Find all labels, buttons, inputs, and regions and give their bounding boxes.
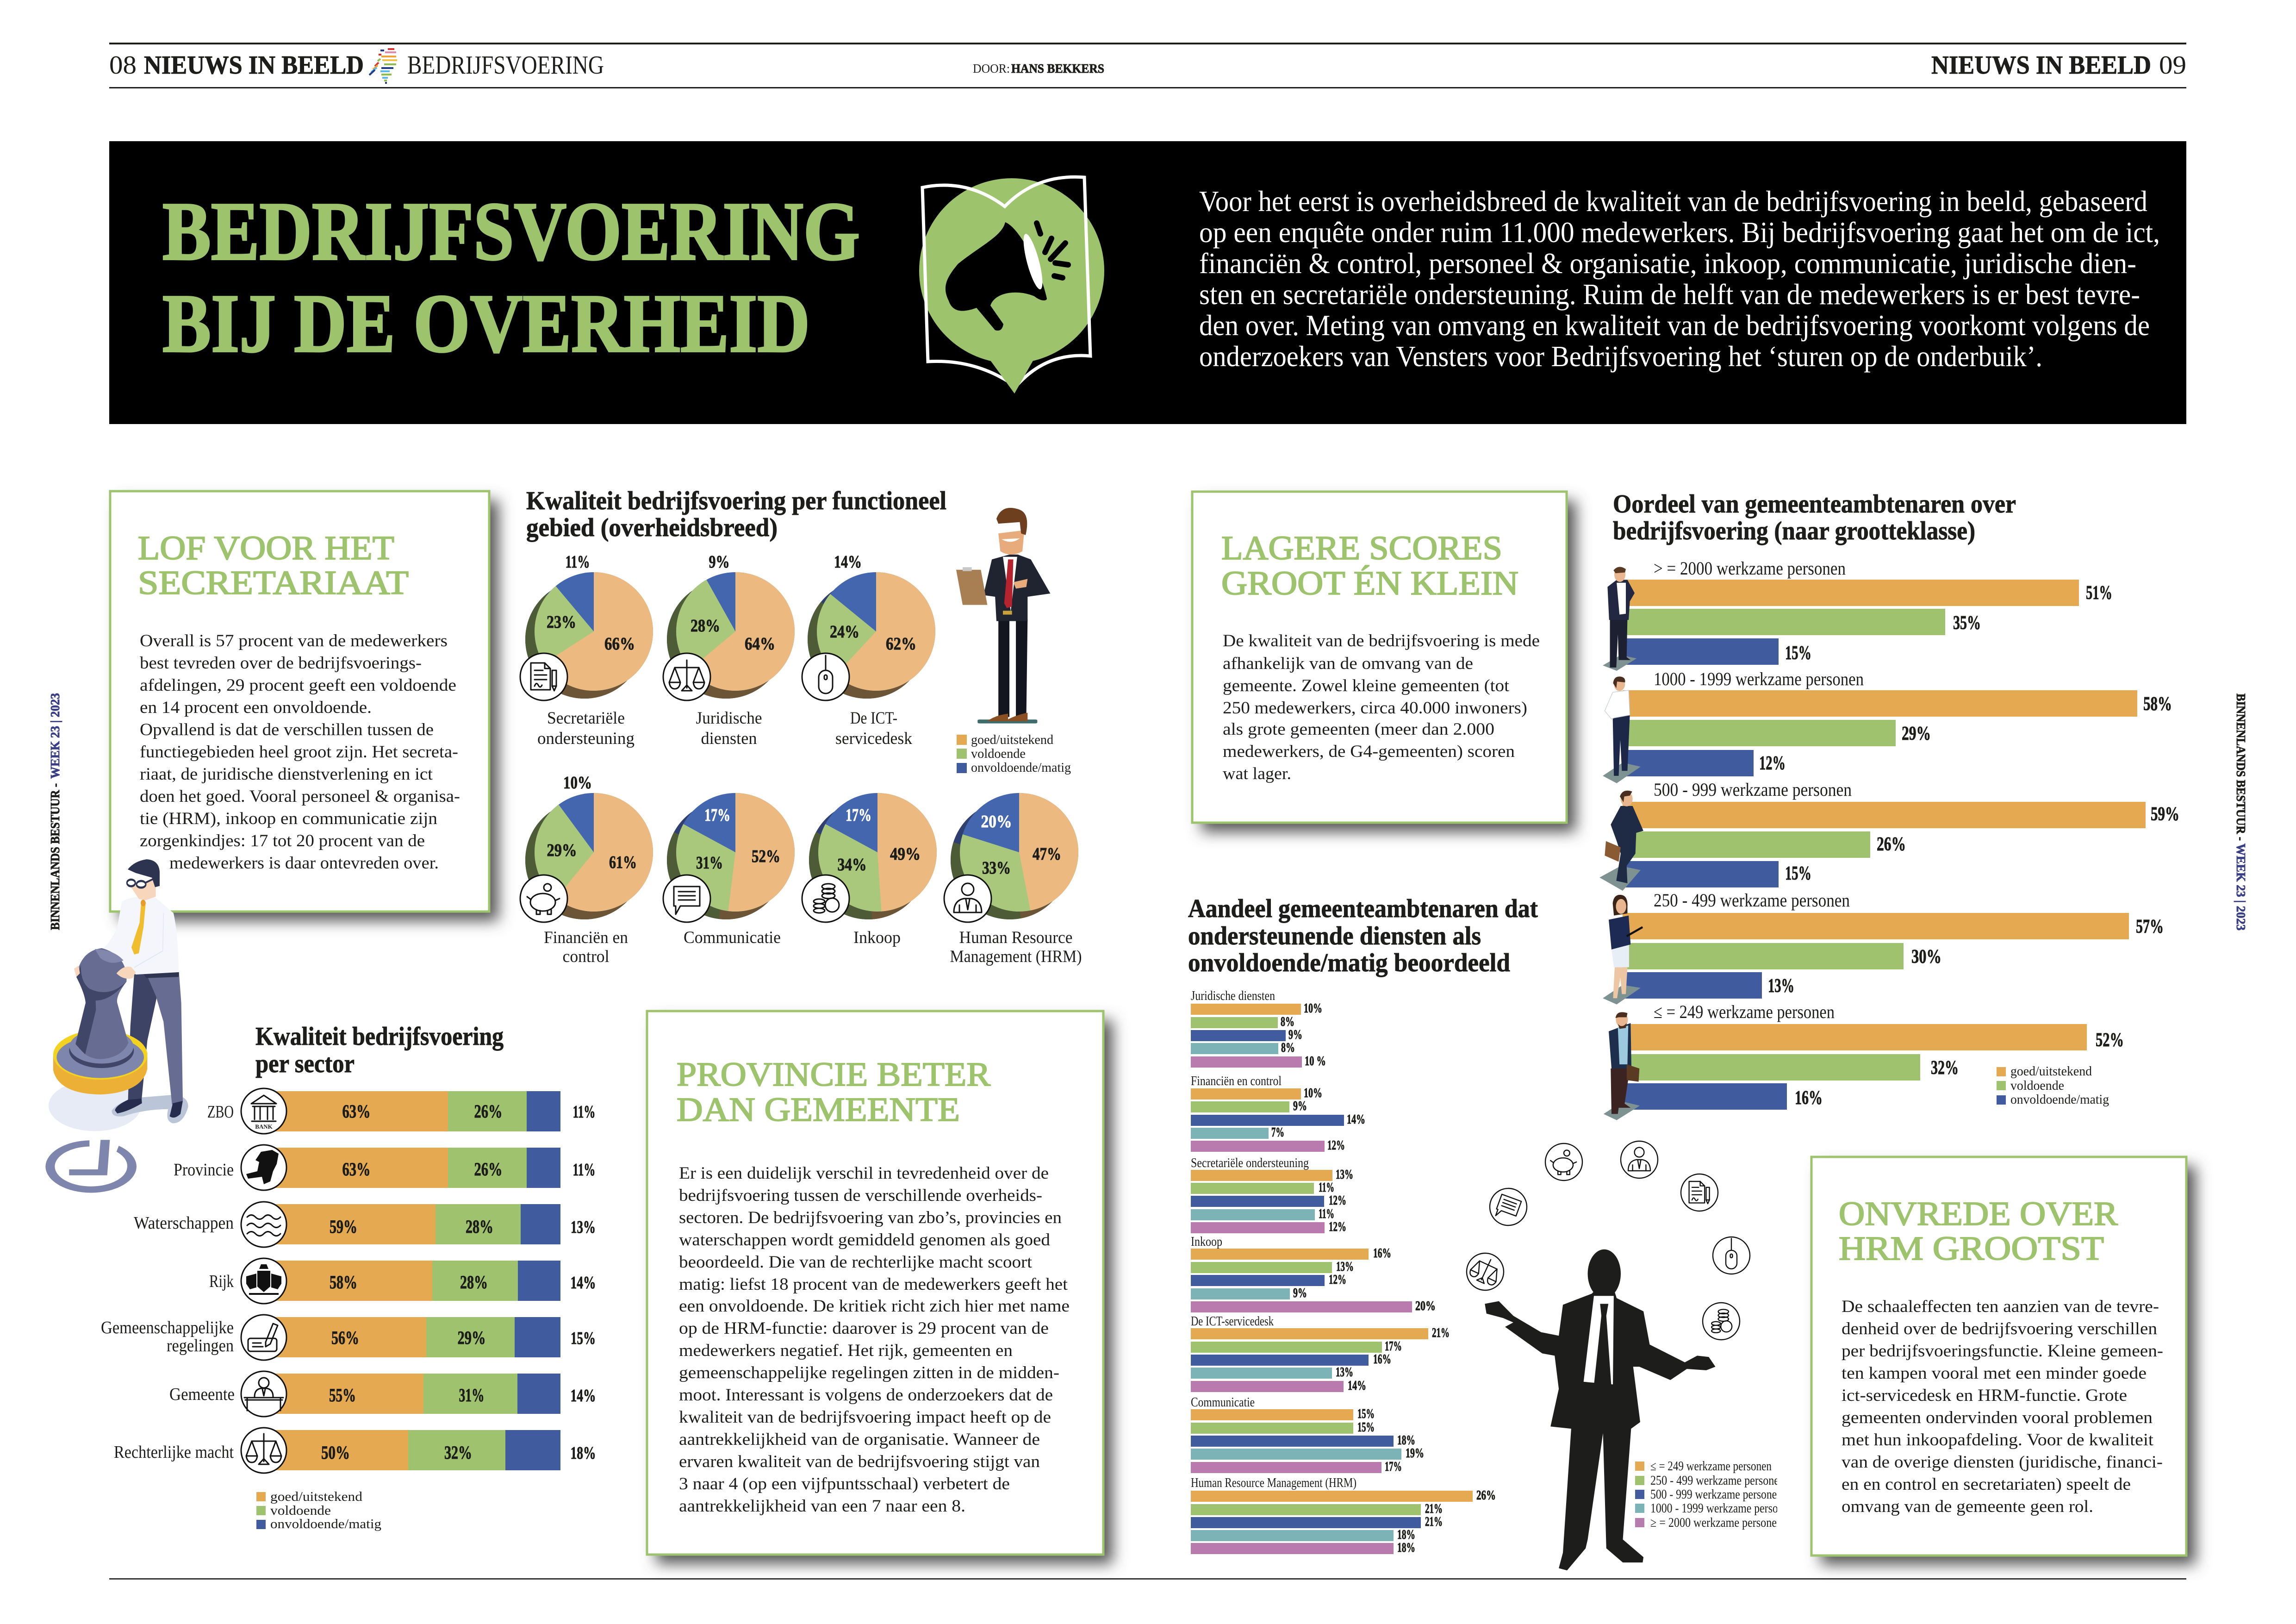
body text: per bedrijfsvoeringsfunctie. Kleine gemeen- bbox=[1842, 1342, 2163, 1361]
bar value labels: 28% bbox=[466, 1216, 493, 1237]
bar value labels: 18% bbox=[570, 1443, 596, 1463]
group: juridische diensten: Juridische diensten bbox=[1191, 989, 1275, 1003]
group: human resource management: 18% bbox=[1397, 1528, 1415, 1542]
bar value labels: 14% bbox=[570, 1386, 596, 1405]
chart title: bedrijfsvoering (naar grootteklasse) bbox=[1613, 517, 1975, 545]
heading: SECRETARIAAT bbox=[138, 564, 409, 601]
pie value labels: 11% bbox=[566, 552, 590, 572]
legend: voldoende bbox=[2010, 1079, 2064, 1093]
intro text: Voor het eerst is overheidsbreed de kwaliteit van de bedrijfsvoering in beeld, gebaseerd bbox=[1199, 185, 2147, 218]
pie value labels: 9% bbox=[709, 552, 729, 572]
body text: gemeente. Zowel kleine gemeenten (tot bbox=[1223, 676, 1510, 695]
title: BIJ DE OVERHEID bbox=[162, 277, 810, 369]
body text: gemeenten ondervinden vooral problemen bbox=[1842, 1408, 2153, 1427]
bar value labels: 14% bbox=[570, 1273, 596, 1293]
heading bbox=[138, 529, 409, 601]
illustration: man with stamp bbox=[45, 859, 188, 1193]
bar value labels: 52% bbox=[2096, 1030, 2124, 1051]
legend bbox=[957, 733, 1071, 775]
page header: 08 bbox=[109, 51, 137, 80]
sector labels: Gemeenschappelijke bbox=[101, 1318, 234, 1337]
group: communicatie bbox=[1191, 1395, 1424, 1474]
pie value labels: 47% bbox=[1033, 844, 1061, 864]
pie: secretariële ondersteuning bbox=[525, 572, 653, 699]
legend: voldoende bbox=[270, 1503, 331, 1518]
bar value labels: 51% bbox=[2086, 582, 2112, 604]
pie icons bbox=[520, 653, 991, 922]
panel: lof voor het secretariaat bbox=[110, 491, 498, 921]
group: financiën en control: 9% bbox=[1293, 1099, 1307, 1113]
group labels: 500 - 999 werkzame personen bbox=[1654, 779, 1852, 800]
bar value labels: 13% bbox=[1768, 975, 1794, 997]
body text: bedrijfsvoering tussen de verschillende overheids- bbox=[679, 1186, 1042, 1205]
chart title: Aandeel gemeenteambtenaren dat bbox=[1188, 894, 1538, 923]
body text: tie (HRM), inkoop en communicatie zijn bbox=[140, 809, 437, 828]
bar value labels: 26% bbox=[474, 1101, 503, 1122]
body text: waterschappen wordt gemiddeld genomen als goed bbox=[679, 1230, 1051, 1249]
pie value labels: 17% bbox=[704, 806, 730, 825]
body text: een onvoldoende. De kritiek richt zich hier met name bbox=[679, 1297, 1070, 1316]
body text: beoordeeld. Die van de rechterlijke macht scoort bbox=[679, 1253, 1033, 1272]
group: juridische diensten bbox=[1191, 989, 1326, 1068]
page header: 09 bbox=[2159, 51, 2186, 80]
group: de ict-servicedesk: 13% bbox=[1336, 1365, 1353, 1380]
legend: 250 - 499 werkzame personen bbox=[1650, 1474, 1785, 1488]
body text: kwaliteit van de bedrijfsvoering impact heeft op de bbox=[679, 1408, 1051, 1427]
group: communicatie: 18% bbox=[1397, 1433, 1415, 1448]
body text: ict-servicedesk en HRM-functie. Grote bbox=[1842, 1386, 2127, 1405]
body text: 3 naar 4 (op een vijfpuntsschaal) verbetert de bbox=[679, 1474, 1010, 1493]
group: de ict-servicedesk: 14% bbox=[1348, 1379, 1366, 1393]
intro text: den over. Meting van omvang en kwaliteit van de bedrijfsvoering voorkomt volgens de bbox=[1199, 309, 2150, 342]
group: juridische diensten: 8% bbox=[1281, 1015, 1294, 1029]
bar value labels: 26% bbox=[474, 1159, 503, 1180]
group: financiën en control: 10% bbox=[1304, 1086, 1322, 1100]
sector icons bbox=[241, 1088, 286, 1473]
chart title: Kwaliteit bedrijfsvoering bbox=[255, 1022, 504, 1051]
body text: best tevreden over de bedrijfsvoerings- bbox=[140, 654, 422, 673]
group labels bbox=[1654, 558, 1864, 1022]
chart title: per sector bbox=[255, 1049, 355, 1078]
icon: coat of arms bbox=[241, 1258, 286, 1304]
group: de ict-servicedesk: 17% bbox=[1385, 1339, 1402, 1354]
bar value labels: 11% bbox=[573, 1160, 595, 1180]
bar value labels bbox=[1759, 582, 2179, 1109]
icon: striped logo bbox=[369, 49, 397, 83]
sector labels: Gemeente bbox=[169, 1385, 235, 1404]
bar value labels: 32% bbox=[1931, 1057, 1959, 1079]
body text bbox=[140, 631, 460, 873]
sector labels: Rijk bbox=[209, 1272, 234, 1291]
body text bbox=[1223, 631, 1540, 783]
group: de ict-servicedesk: 21% bbox=[1432, 1326, 1450, 1340]
bar value labels: 56% bbox=[331, 1327, 359, 1348]
group: de ict-servicedesk: De ICT-servicedesk bbox=[1191, 1314, 1274, 1329]
title bbox=[162, 185, 860, 369]
legend: onvoldoende/matig bbox=[270, 1517, 381, 1531]
icon: bank bbox=[241, 1088, 286, 1134]
page header: NIEUWS IN BEELD bbox=[144, 51, 364, 80]
group: financiën en control: 14% bbox=[1347, 1112, 1365, 1127]
banner: black title panel bbox=[109, 141, 2186, 424]
bar value labels: 31% bbox=[459, 1385, 484, 1405]
pie category labels: Management (HRM) bbox=[950, 947, 1082, 966]
body text: afhankelijk van de omvang van de bbox=[1223, 654, 1473, 673]
body text: De kwaliteit van de bedrijfsvoering is mede bbox=[1223, 631, 1540, 650]
body text: medewerkers is daar ontevreden over. bbox=[169, 854, 439, 873]
pie value labels bbox=[547, 552, 1061, 878]
pie value labels: 61% bbox=[609, 853, 637, 872]
icon: netherlands map bbox=[241, 1145, 286, 1190]
side label left: BINNENLANDS BESTUUR - bbox=[48, 783, 62, 930]
chart title bbox=[1188, 894, 1538, 977]
pie category labels: Financiën en bbox=[544, 928, 628, 947]
bar value labels bbox=[321, 1101, 596, 1463]
chart title: Kwaliteit bedrijfsvoering per functioneel bbox=[526, 487, 946, 515]
body text: doen het goed. Vooral personeel & organisa- bbox=[140, 787, 460, 806]
panel: onvrede over hrm grootst bbox=[1811, 1157, 2196, 1565]
bar value labels: 16% bbox=[1795, 1087, 1823, 1109]
pie category labels: control bbox=[563, 947, 609, 966]
sector labels: regelingen bbox=[167, 1336, 234, 1355]
group: human resource management: 21% bbox=[1425, 1502, 1443, 1516]
pie category labels: De ICT- bbox=[850, 709, 897, 728]
bar value labels: 59% bbox=[2151, 804, 2179, 825]
group: financiën en control: 12% bbox=[1327, 1138, 1345, 1153]
heading: LAGERE SCORES bbox=[1221, 529, 1502, 567]
body text: en 14 procent een onvoldoende. bbox=[140, 698, 372, 717]
chart: quality per sector bbox=[101, 1022, 596, 1531]
pie category labels: Juridische bbox=[696, 709, 762, 728]
body text: De schaaleffecten ten aanzien van de tevre- bbox=[1842, 1297, 2159, 1316]
group: inkoop: 20% bbox=[1415, 1299, 1436, 1313]
pie category labels: ondersteuning bbox=[537, 729, 635, 748]
group: inkoop bbox=[1191, 1235, 1436, 1313]
group: communicatie: 17% bbox=[1385, 1460, 1402, 1474]
heading: DAN GEMEENTE bbox=[677, 1091, 960, 1128]
legend: goed/uitstekend bbox=[971, 733, 1053, 747]
panel: lagere scores groot en klein bbox=[1192, 492, 1576, 832]
pie value labels: 66% bbox=[604, 634, 635, 654]
pie category labels: Secretariële bbox=[547, 709, 625, 728]
panel: provincie beter dan gemeente bbox=[647, 1011, 1113, 1564]
heading: GROOT ÉN KLEIN bbox=[1221, 564, 1518, 602]
bar value labels: 58% bbox=[330, 1272, 357, 1293]
group: secretariële ondersteuning: 11% bbox=[1319, 1207, 1334, 1221]
body text: sectoren. De bedrijfsvoering van zbo’s, provincies en bbox=[679, 1208, 1062, 1227]
bar value labels: 12% bbox=[1759, 753, 1786, 774]
bar value labels: 57% bbox=[2136, 916, 2164, 937]
group: juridische diensten: 8% bbox=[1281, 1041, 1295, 1055]
pie value labels: 31% bbox=[696, 853, 723, 873]
horizontal bars bbox=[1623, 580, 2146, 1110]
legend: 500 - 999 werkzame personen bbox=[1650, 1487, 1782, 1502]
pie category labels: Inkoop bbox=[853, 928, 901, 947]
chart title bbox=[1613, 490, 2016, 545]
heading: LOF VOOR HET bbox=[138, 529, 394, 567]
body text: functiegebieden heel groot zijn. Het secreta- bbox=[140, 743, 458, 762]
legend: ≤ = 249 werkzame personen bbox=[1650, 1459, 1772, 1474]
body text: met hun inkoopafdeling. Voor de kwaliteit bbox=[1842, 1430, 2154, 1449]
pie category labels: servicedesk bbox=[835, 729, 912, 748]
page header: BEDRIJFSVOERING bbox=[407, 51, 604, 80]
group: secretariële ondersteuning: 11% bbox=[1319, 1181, 1334, 1195]
heading: PROVINCIE BETER bbox=[677, 1056, 990, 1093]
body text: ten kampen vooral met een minder goede bbox=[1842, 1364, 2147, 1383]
chart: judgement by municipality size bbox=[1599, 490, 2179, 1120]
body text: moot. Interessant is volgens de onderzoekers dat de bbox=[679, 1386, 1053, 1405]
pie value labels: 49% bbox=[890, 844, 921, 864]
body text: zorgenkindjes: 17 tot 20 procent van de bbox=[140, 831, 425, 850]
stacked bars bbox=[273, 1091, 560, 1470]
title: BEDRIJFSVOERING bbox=[162, 185, 860, 277]
bar value labels: 15% bbox=[571, 1329, 596, 1348]
group: communicatie: 15% bbox=[1357, 1420, 1375, 1435]
group: de ict-servicedesk bbox=[1191, 1314, 1450, 1393]
body text: medewerkers negatief. Het rijk, gemeenten en bbox=[679, 1341, 1013, 1360]
pie value labels: 23% bbox=[547, 612, 576, 632]
chart title: onvoldoende/matig beoordeeld bbox=[1188, 949, 1510, 977]
legend bbox=[1997, 1064, 2109, 1107]
group: inkoop: 13% bbox=[1336, 1260, 1354, 1274]
body text: aantrekkelijkheid van een 7 naar een 8. bbox=[679, 1497, 965, 1516]
sector labels: ZBO bbox=[207, 1102, 234, 1122]
pie: juridische diensten bbox=[667, 572, 795, 699]
body text: denheid over de bedrijfsvoering verschillen bbox=[1842, 1319, 2157, 1338]
group: secretariële ondersteuning: 12% bbox=[1329, 1220, 1346, 1234]
legend: goed/uitstekend bbox=[2010, 1064, 2092, 1079]
body text: 250 medewerkers, circa 40.000 inwoners) bbox=[1223, 699, 1527, 718]
page header: HANS BEKKERS bbox=[1011, 62, 1104, 75]
pie value labels: 10% bbox=[563, 773, 592, 793]
sector labels: Rechterlijke macht bbox=[114, 1443, 234, 1462]
body text: van de overige diensten (juridische, financi- bbox=[1842, 1453, 2163, 1472]
sector labels bbox=[101, 1102, 235, 1462]
group: financiën en control bbox=[1191, 1074, 1365, 1153]
body text bbox=[679, 1164, 1070, 1516]
floating icons bbox=[1461, 1141, 1750, 1340]
chart title bbox=[526, 487, 946, 542]
bar value labels: 59% bbox=[330, 1216, 357, 1237]
pie category labels: Human Resource bbox=[959, 928, 1073, 947]
legend: 1000 - 1999 werkzame personen bbox=[1650, 1501, 1794, 1516]
group: secretariële ondersteuning: 13% bbox=[1336, 1168, 1353, 1182]
heading: HRM GROOTST bbox=[1839, 1230, 2104, 1267]
body text: Overall is 57 procent van de medewerkers bbox=[140, 631, 448, 650]
body text: en en control en secretariaten) speelt de bbox=[1842, 1475, 2131, 1494]
group: inkoop: 12% bbox=[1329, 1273, 1346, 1287]
bar value labels: 55% bbox=[329, 1385, 356, 1405]
side label left bbox=[48, 693, 62, 930]
pie category labels bbox=[537, 709, 1082, 966]
intro text: financiën & control, personeel & organisatie, inkoop, communicatie, juridische dien- bbox=[1199, 247, 2136, 280]
group labels: 250 - 499 werkzame personen bbox=[1654, 890, 1850, 911]
group: secretariële ondersteuning: Secretariële ondersteuning bbox=[1191, 1156, 1309, 1170]
group: communicatie: Communicatie bbox=[1191, 1395, 1255, 1410]
chart: quality per functional area bbox=[520, 487, 1082, 966]
legend: goed/uitstekend bbox=[270, 1489, 363, 1504]
bar value labels: 26% bbox=[1877, 834, 1906, 855]
group: human resource management: 21% bbox=[1425, 1515, 1443, 1529]
group: human resource management bbox=[1191, 1476, 1496, 1555]
icon: scales bbox=[241, 1428, 286, 1473]
pie value labels: 33% bbox=[982, 858, 1011, 878]
body text: wat lager. bbox=[1223, 764, 1291, 783]
body text: medewerkers, de G4-gemeenten) scoren bbox=[1223, 742, 1515, 761]
intro text: onderzoekers van Vensters voor Bedrijfsvoering het ‘sturen op de onderbuik’. bbox=[1199, 340, 2042, 373]
icon: water waves bbox=[241, 1202, 286, 1247]
bar value labels: 50% bbox=[321, 1442, 350, 1463]
bar value labels: 13% bbox=[571, 1218, 596, 1237]
group: secretariële ondersteuning: 12% bbox=[1329, 1193, 1346, 1208]
body text: ervaren kwaliteit van de bedrijfsvoering stijgt van bbox=[679, 1452, 1040, 1471]
bar value labels: 63% bbox=[342, 1101, 370, 1122]
pie value labels: 64% bbox=[745, 634, 775, 654]
side label right: BINNENLANDS BESTUUR - bbox=[2234, 693, 2248, 841]
legend bbox=[256, 1489, 381, 1531]
icon: bank: BANK bbox=[255, 1123, 273, 1130]
legend: onvoldoende/matig bbox=[2010, 1093, 2109, 1107]
pie: human resource management bbox=[951, 793, 1078, 919]
group: juridische diensten: 10% bbox=[1304, 1001, 1322, 1016]
pie value labels: 62% bbox=[886, 634, 916, 654]
page header bbox=[109, 43, 2186, 88]
pie value labels: 20% bbox=[981, 812, 1012, 831]
group: human resource management: 18% bbox=[1397, 1541, 1415, 1555]
group labels: > = 2000 werkzame personen bbox=[1654, 558, 1846, 579]
pie: inkoop bbox=[809, 793, 937, 919]
intro text: sten en secretariële ondersteuning. Ruim de helft van de medewerkers is er best tevre- bbox=[1199, 278, 2140, 311]
bar value labels: 30% bbox=[1911, 946, 1941, 968]
chart: share rating support services as insufficient bbox=[1188, 894, 1794, 1570]
body text: gemeenschappelijke regelingen zitten in de midden- bbox=[679, 1363, 1059, 1382]
pie category labels: diensten bbox=[701, 729, 757, 748]
icon: megaphone in speech bubble and book bbox=[919, 177, 1104, 394]
page header: DOOR: bbox=[973, 62, 1010, 75]
pie value labels: 52% bbox=[752, 847, 780, 866]
group: financiën en control: 7% bbox=[1271, 1125, 1284, 1140]
side label right: WEEK 23 | 2023 bbox=[2234, 843, 2248, 931]
heading bbox=[1221, 529, 1518, 602]
heading bbox=[677, 1056, 990, 1128]
pie value labels: 14% bbox=[834, 552, 862, 572]
bar value labels: 29% bbox=[457, 1327, 486, 1348]
pie: ict-servicedesk bbox=[808, 572, 935, 699]
side label left: WEEK 23 | 2023 bbox=[48, 693, 62, 779]
legend: ≥ = 2000 werkzame personen bbox=[1650, 1516, 1782, 1530]
body text bbox=[1842, 1297, 2163, 1516]
pie value labels: 28% bbox=[691, 616, 720, 636]
group: inkoop: 9% bbox=[1293, 1286, 1307, 1300]
pie value labels: 34% bbox=[838, 855, 866, 874]
bar value labels: 63% bbox=[342, 1159, 370, 1180]
bar value labels: 35% bbox=[1953, 612, 1981, 634]
legend: voldoende bbox=[971, 747, 1026, 761]
illustration: silhouette businessman bbox=[1485, 1249, 1715, 1570]
body text: Er is een duidelijk verschil in tevredenheid over de bbox=[679, 1164, 1049, 1183]
heading bbox=[1839, 1195, 2118, 1267]
pie value labels: 29% bbox=[547, 841, 577, 860]
group: inkoop: 16% bbox=[1373, 1246, 1391, 1261]
pie category labels: Communicatie bbox=[684, 928, 781, 947]
pie: communicatie bbox=[667, 793, 795, 919]
group: financiën en control: Financiën en control bbox=[1191, 1074, 1282, 1088]
side label right bbox=[2234, 693, 2248, 931]
legend bbox=[1635, 1461, 1777, 1530]
sector labels: Waterschappen bbox=[134, 1213, 234, 1233]
illustration: businessman with clipboard bbox=[956, 508, 1050, 724]
group: juridische diensten: 9% bbox=[1288, 1028, 1302, 1042]
body text: op de HRM-functie: daarover is 29 procent van de bbox=[679, 1319, 1049, 1338]
group: secretariële ondersteuning bbox=[1191, 1156, 1353, 1234]
group labels: 1000 - 1999 werkzame personen bbox=[1654, 668, 1864, 689]
intro text: op een enquête onder ruim 11.000 medewerkers. Bij bedrijfsvoering gaat het om de ict, bbox=[1199, 216, 2160, 249]
body text: Opvallend is dat de verschillen tussen de bbox=[140, 720, 434, 739]
body text: omvang van de gemeente geen rol. bbox=[1842, 1497, 2093, 1516]
icon: cheque and pen bbox=[241, 1315, 286, 1360]
bar value labels: 15% bbox=[1785, 643, 1811, 664]
icon: person at desk bbox=[241, 1371, 286, 1417]
group: human resource management: Human Resource Management (HRM) bbox=[1191, 1476, 1356, 1490]
body text: afdelingen, 29 procent geeft een voldoende bbox=[140, 676, 456, 695]
heading: ONVREDE OVER bbox=[1839, 1195, 2118, 1232]
group: inkoop: Inkoop bbox=[1191, 1235, 1222, 1249]
group: de ict-servicedesk: 16% bbox=[1373, 1352, 1391, 1367]
pie value labels: 17% bbox=[846, 806, 871, 825]
group: communicatie: 19% bbox=[1406, 1446, 1424, 1461]
group: juridische diensten: 10 % bbox=[1305, 1054, 1326, 1068]
bar value labels: 15% bbox=[1785, 863, 1811, 884]
chart title: Oordeel van gemeenteambtenaren over bbox=[1613, 490, 2016, 518]
illustration: five office workers bbox=[1599, 567, 1643, 1120]
group labels: ≤ = 249 werkzame personen bbox=[1654, 1001, 1835, 1022]
sector labels: Provincie bbox=[174, 1160, 234, 1180]
page header: NIEUWS IN BEELD bbox=[1931, 51, 2151, 80]
group: human resource management: 26% bbox=[1476, 1488, 1496, 1503]
legend: onvoldoende/matig bbox=[971, 761, 1071, 775]
chart title bbox=[255, 1022, 504, 1078]
chart title: gebied (overheidsbreed) bbox=[526, 513, 778, 542]
bar value labels: 11% bbox=[573, 1102, 595, 1122]
chart title: ondersteunende diensten als bbox=[1188, 922, 1481, 950]
pie value labels: 24% bbox=[830, 622, 859, 642]
bar value labels: 28% bbox=[460, 1272, 488, 1293]
body text: als grote gemeenten (meer dan 2.000 bbox=[1223, 720, 1494, 739]
group: communicatie: 15% bbox=[1357, 1407, 1375, 1421]
body text: matig: liefst 18 procent van de medewerkers geeft het bbox=[679, 1275, 1068, 1294]
body text: aantrekkelijkheid van de organisatie. Wanneer de bbox=[679, 1430, 1040, 1449]
bar value labels: 29% bbox=[1902, 723, 1931, 744]
pie: financiën en control bbox=[525, 793, 653, 919]
bar value labels: 58% bbox=[2143, 693, 2172, 715]
intro text bbox=[1199, 185, 2160, 373]
bar value labels: 32% bbox=[444, 1442, 472, 1463]
body text: riaat, de juridische dienstverlening en ict bbox=[140, 765, 433, 784]
